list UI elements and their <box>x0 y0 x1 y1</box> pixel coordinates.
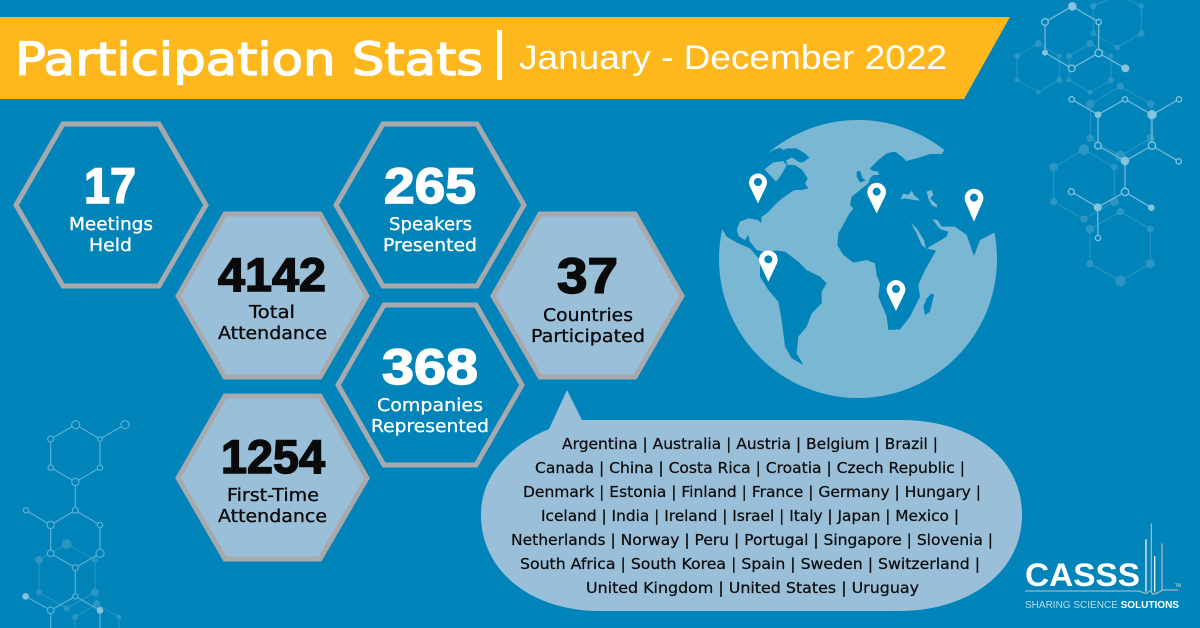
hexagon: companies represented <box>338 305 522 465</box>
hexagon: total attendance <box>178 214 367 377</box>
hexagon: countries participated <box>493 214 682 377</box>
hexagon: countries participated: 37 <box>557 248 618 304</box>
date range: January - December 2022 <box>519 39 947 77</box>
callout: list of participating countries: Denmark | Estonia | Finland | France | Germany | Hungary | <box>523 483 981 501</box>
hexagon: first-time attendance: First-Time <box>227 486 319 506</box>
hexagon: first-time attendance: Attendance <box>218 507 327 527</box>
hexagon: first-time attendance: 1254 <box>221 430 325 483</box>
logo: CASSS: SHARING SCIENCE SOLUTIONS <box>1025 599 1179 611</box>
hexagon: total attendance: 4142 <box>218 248 326 301</box>
callout: list of participating countries: Argentina | Australia | Austria | Belgium | Brazil | <box>562 435 938 453</box>
logo: CASSS: TM <box>1174 583 1181 588</box>
callout: list of participating countries <box>481 390 1022 611</box>
pin: South America <box>759 250 778 282</box>
pin: Africa <box>887 280 905 311</box>
globe with map pins <box>700 120 1033 398</box>
hexagon: total attendance: Total <box>248 303 295 323</box>
callout: list of participating countries: Canada | China | Costa Rica | Croatia | Czech Republic | <box>535 459 965 477</box>
hexagon: speakers presented <box>336 124 524 286</box>
molecule decoration: top right <box>1014 0 1182 286</box>
hexagon: speakers presented: 265 <box>384 158 476 214</box>
hexagon: meetings held <box>16 124 206 286</box>
hexagon: meetings held: Meetings <box>69 215 153 235</box>
hexagon: total attendance: Attendance <box>218 324 327 344</box>
logo: CASSS: CASSS <box>1025 557 1140 593</box>
hexagon: meetings held: Held <box>89 236 132 256</box>
pin: North America <box>749 174 767 203</box>
callout: list of participating countries: Netherlands | Norway | Peru | Portugal | Singapore | Slovenia | <box>511 531 993 549</box>
callout: list of participating countries: South Africa | South Korea | Spain | Sweden | Switzerland | <box>520 555 980 573</box>
hexagon: countries participated: Countries <box>543 306 633 326</box>
callout: list of participating countries: United Kingdom | United States | Uruguay <box>586 579 919 597</box>
hexagon: meetings held: 17 <box>84 158 136 214</box>
hexagon: companies represented: 368 <box>382 339 478 395</box>
title: Participation Stats <box>15 33 483 86</box>
hexagon: speakers presented: Speakers <box>389 215 472 235</box>
hexagon: companies represented: Represented <box>371 417 489 437</box>
pin: Asia <box>965 189 983 222</box>
header banner <box>0 17 1010 99</box>
hexagon: companies represented: Companies <box>377 396 483 416</box>
hexagon: countries participated: Participated <box>531 327 645 347</box>
molecule decoration: bottom left <box>22 421 129 628</box>
hexagon: first-time attendance <box>178 396 367 559</box>
logo: CASSS <box>1025 523 1181 611</box>
pin: Europe <box>867 183 886 213</box>
hexagon: speakers presented: Presented <box>383 236 477 256</box>
title divider <box>497 30 502 80</box>
callout: list of participating countries: Iceland | India | Ireland | Israel | Italy | Japan | Mexico | <box>541 507 959 525</box>
